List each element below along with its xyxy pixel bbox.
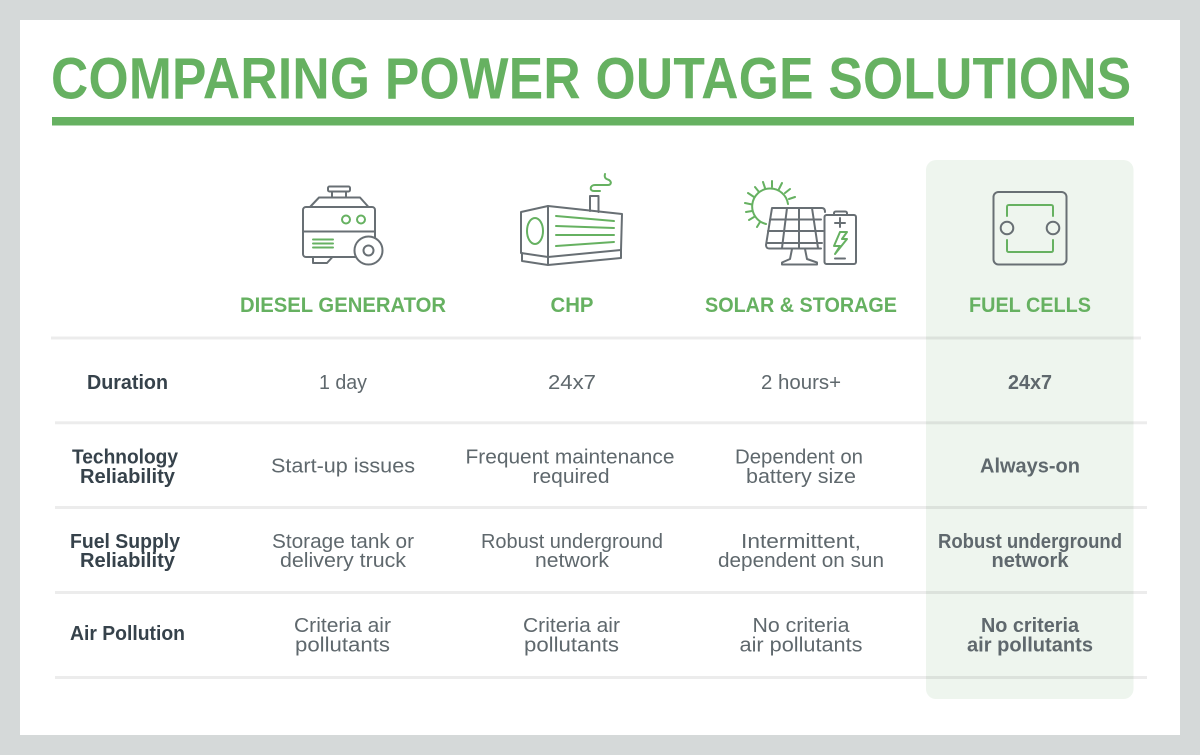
row: air pollution: Air Pollution [70, 623, 185, 645]
row: fuel supply reliability: Robust underground [481, 531, 663, 553]
row dividers [51, 336, 1147, 679]
row: duration: 24x7 [548, 372, 596, 394]
icon: diesel generator [303, 186, 382, 264]
row: fuel supply reliability: dependent on sun [718, 550, 884, 572]
column headings: SOLAR & STORAGE [705, 293, 897, 317]
row: air pollution: air pollutants [740, 634, 862, 656]
row: fuel supply reliability: Fuel Supply [70, 531, 181, 553]
row: technology reliability: Always-on [980, 456, 1080, 478]
row: air pollution: No criteria [752, 615, 850, 637]
row: fuel supply reliability: Intermittent, [741, 531, 861, 553]
row: air pollution [70, 615, 1093, 656]
column headings: CHP [550, 293, 594, 317]
row: duration: Duration [87, 372, 168, 394]
column headings [240, 293, 1091, 317]
icon: fuel cell [994, 192, 1066, 264]
column headings: FUEL CELLS [969, 293, 1091, 317]
row: fuel supply reliability: Reliability [80, 550, 176, 572]
panel: fuel cells highlight [926, 160, 1134, 699]
row: technology reliability: Start-up issues [271, 456, 415, 478]
row: duration: 2 hours+ [761, 372, 841, 394]
row: fuel supply reliability: delivery truck [280, 550, 407, 572]
row: air pollution: Criteria air [523, 615, 620, 637]
column headings: DIESEL GENERATOR [240, 293, 446, 317]
title: COMPARING POWER OUTAGE SOLUTIONS [51, 46, 1131, 111]
row: fuel supply reliability: Storage tank or [272, 531, 414, 553]
icon: CHP engine [521, 174, 622, 265]
row: technology reliability: Reliability [80, 466, 176, 488]
row: air pollution: air pollutants [967, 634, 1093, 656]
row: air pollution: No criteria [981, 615, 1080, 637]
row: duration: 1 day [319, 372, 367, 394]
title rule [52, 117, 1134, 126]
row: technology reliability: required [532, 466, 610, 488]
row: fuel supply reliability [70, 531, 1122, 572]
row: technology reliability: Dependent on [735, 446, 863, 468]
row: fuel supply reliability: network [535, 550, 610, 572]
row: technology reliability: Technology [72, 446, 179, 468]
row: duration [87, 372, 1052, 394]
row: technology reliability [72, 446, 1080, 488]
row: air pollution: Criteria air [294, 615, 391, 637]
row: technology reliability: battery size [746, 466, 856, 488]
row: technology reliability: Frequent maintenance [466, 446, 674, 468]
row: air pollution: pollutants [295, 634, 390, 656]
row: duration: 24x7 [1008, 372, 1052, 394]
icon: solar and storage [745, 181, 856, 264]
row: fuel supply reliability: network [992, 550, 1069, 572]
row: air pollution: pollutants [524, 634, 619, 656]
row: fuel supply reliability: Robust underground [938, 531, 1122, 553]
